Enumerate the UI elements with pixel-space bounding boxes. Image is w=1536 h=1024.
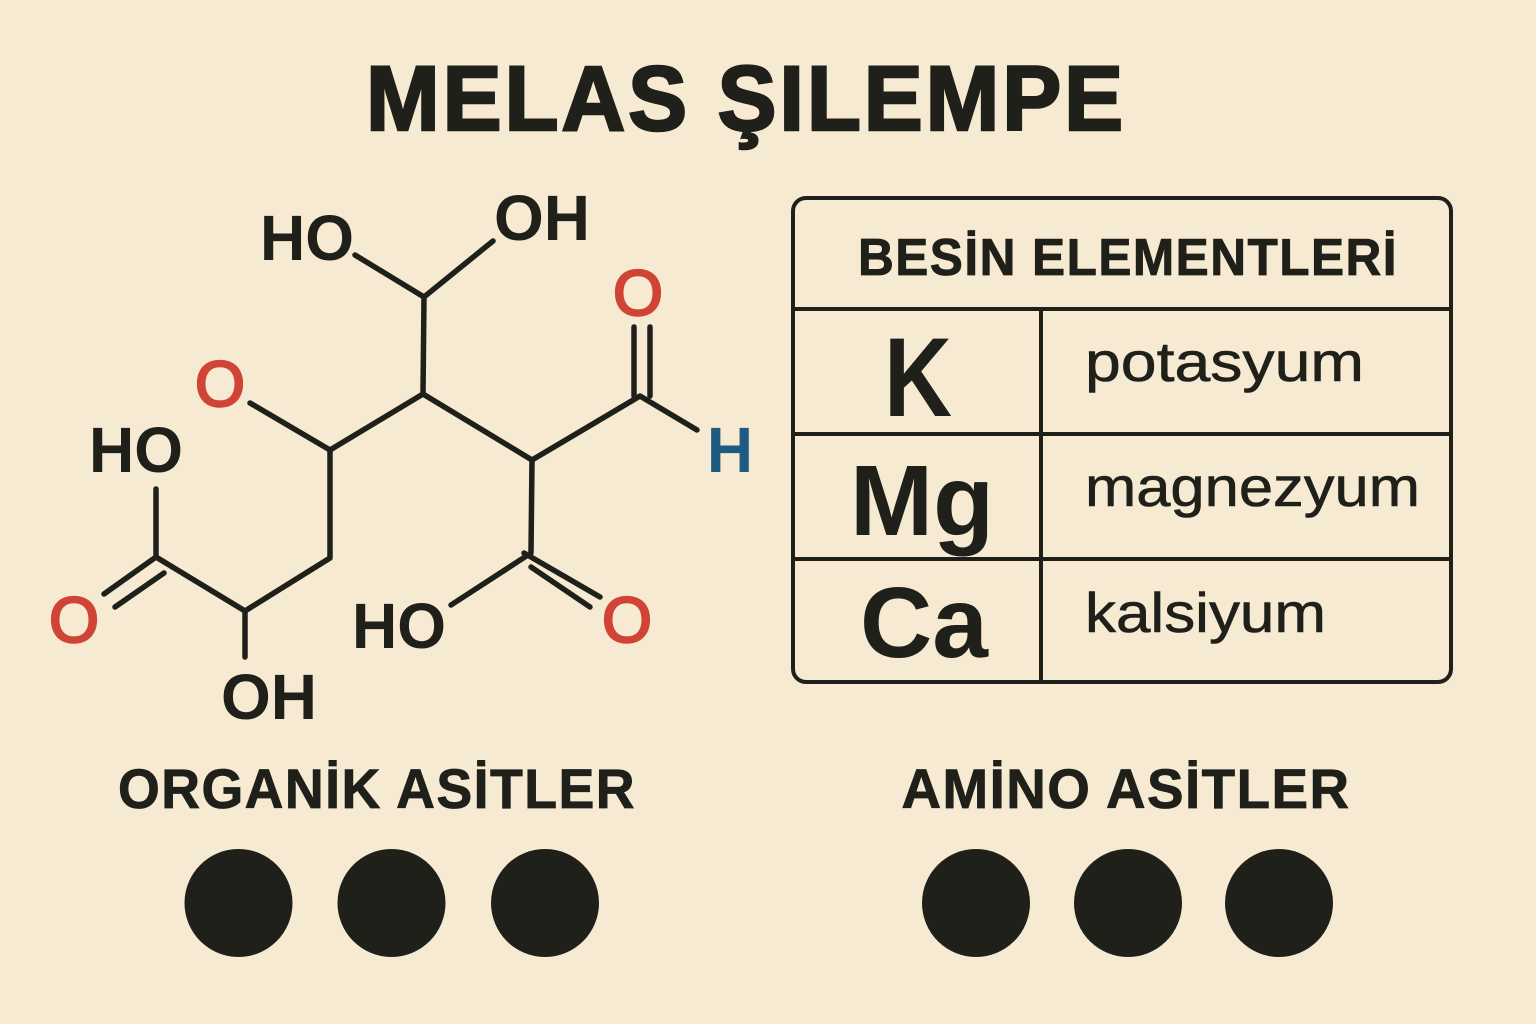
atom label: O bottom left: O	[49, 584, 99, 656]
heading: amino acids: AMİNO ASİTLER	[902, 757, 1350, 820]
row: calcium: kalsiyum	[1085, 581, 1326, 644]
atom label: H: H	[707, 414, 753, 486]
atom label: HO left: HO	[89, 414, 183, 486]
row: magnesium	[850, 445, 1420, 557]
table heading: BESİN ELEMENTLERİ	[858, 229, 1398, 287]
row: potassium	[884, 315, 1364, 440]
atom label: HO bottom: HO	[352, 590, 446, 662]
nutrient table panel	[793, 198, 1451, 682]
atom label: O left: O	[195, 348, 245, 420]
row: potassium: potasyum	[1085, 330, 1364, 393]
atom label: O top right: O	[613, 257, 663, 329]
row: magnesium: magnezyum	[1085, 455, 1420, 518]
row: calcium: Ca	[860, 567, 989, 679]
atom label: OH bottom: OH	[221, 661, 317, 733]
chemical structure diagram	[49, 182, 753, 733]
organic acid dots	[184, 849, 599, 957]
row: calcium	[860, 567, 1326, 679]
bonds	[104, 241, 697, 657]
row: magnesium: Mg	[850, 445, 994, 557]
heading: organic acids: ORGANİK ASİTLER	[118, 757, 636, 820]
amino acid dots	[922, 849, 1333, 957]
title: MELAS ŞILEMPE	[366, 48, 1126, 150]
row: potassium: K	[884, 315, 952, 440]
atom label: OH top: OH	[494, 182, 590, 254]
table frame and grid	[793, 198, 1451, 682]
atom label: HO top: HO	[260, 202, 354, 274]
atom label: O bottom right: O	[602, 584, 652, 656]
